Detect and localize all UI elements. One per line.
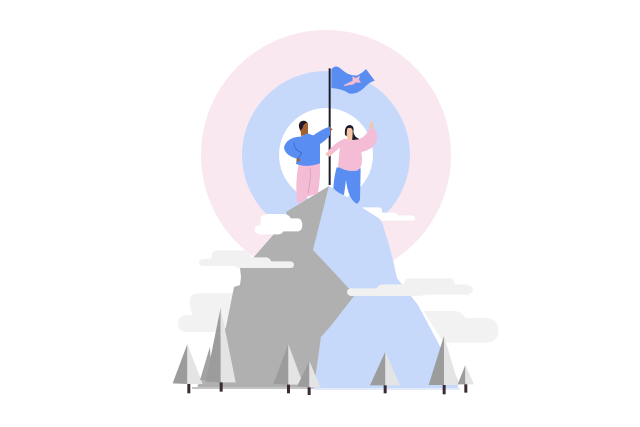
man: legs	[296, 163, 320, 203]
tree 7	[458, 365, 474, 393]
cloud: far right back	[423, 311, 498, 343]
woman: lower hand	[327, 152, 331, 156]
man: hands	[330, 127, 333, 131]
cloud: middle left	[199, 250, 294, 268]
mountain: blue side	[313, 186, 458, 388]
tree 5	[370, 352, 400, 393]
tree 4	[297, 361, 321, 395]
cloud: upper right white	[362, 207, 415, 221]
tree 6	[429, 336, 459, 394]
cloud: middle right	[347, 278, 473, 296]
man: sweater	[284, 127, 330, 166]
tree 2	[200, 308, 236, 392]
tree 1	[173, 344, 203, 393]
tree group left	[173, 308, 321, 395]
cloud: upper left white	[255, 214, 302, 234]
people and flag	[284, 66, 377, 204]
flag	[331, 66, 375, 94]
woman: face	[347, 128, 353, 140]
woman: sweater	[325, 127, 377, 171]
man: head	[299, 121, 308, 136]
woman: hair	[345, 125, 360, 140]
woman: raised hand	[369, 121, 373, 128]
ground line	[192, 387, 460, 390]
target circles	[201, 30, 451, 280]
woman	[325, 121, 377, 204]
tree 3	[273, 344, 303, 393]
man	[284, 121, 333, 203]
tree group right	[370, 336, 474, 394]
mountain: gray side	[197, 186, 355, 388]
cloud: far left back	[178, 293, 233, 332]
flagpole	[329, 68, 331, 185]
woman: legs	[333, 167, 361, 204]
